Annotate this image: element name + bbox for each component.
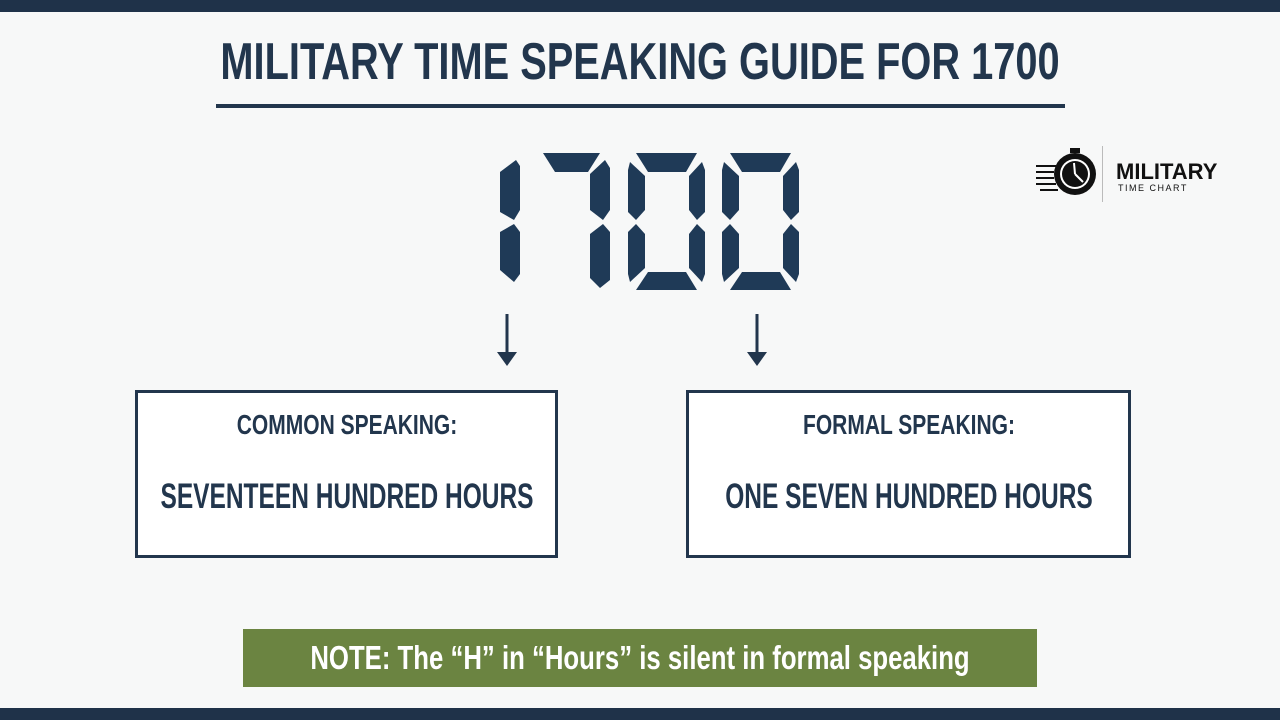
panel: formal speaking: ONE SEVEN HUNDRED HOURS — [725, 477, 1092, 516]
digital clock 1700 — [500, 153, 799, 290]
title: MILITARY TIME SPEAKING GUIDE FOR 1700 — [220, 33, 1060, 91]
panel: formal speaking — [686, 390, 1131, 558]
panel: common speaking: SEVENTEEN HUNDRED HOURS — [160, 477, 533, 516]
panel: common speaking: COMMON SPEAKING: — [236, 409, 457, 440]
logo — [1036, 146, 1217, 202]
arrow left — [497, 314, 517, 366]
logo: TIME CHART — [1118, 183, 1188, 193]
panel: common speaking — [135, 390, 558, 558]
arrow right — [747, 314, 767, 366]
note bar — [243, 629, 1037, 687]
panel: formal speaking: FORMAL SPEAKING: — [803, 409, 1014, 440]
logo: MILITARY — [1116, 159, 1217, 184]
note bar: NOTE: The “H” in “Hours” is silent in formal speaking — [310, 639, 970, 676]
